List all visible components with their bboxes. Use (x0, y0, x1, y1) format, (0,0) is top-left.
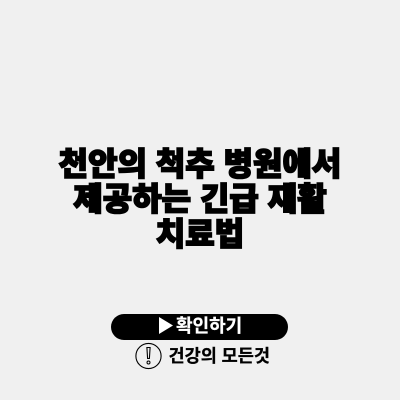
icon: play triangle (159, 317, 173, 334)
brand label: 건강의 모든것 (168, 346, 270, 366)
title (58, 146, 341, 252)
title: 천안의 척추 병원에서 (59, 146, 341, 182)
icon: exclamation circle (135, 342, 162, 370)
title: 치료법 (156, 216, 244, 252)
title: 제공하는 긴급 재활 (73, 181, 327, 217)
button label: 확인하기 (176, 316, 242, 336)
button: 확인하기 (111, 314, 288, 340)
